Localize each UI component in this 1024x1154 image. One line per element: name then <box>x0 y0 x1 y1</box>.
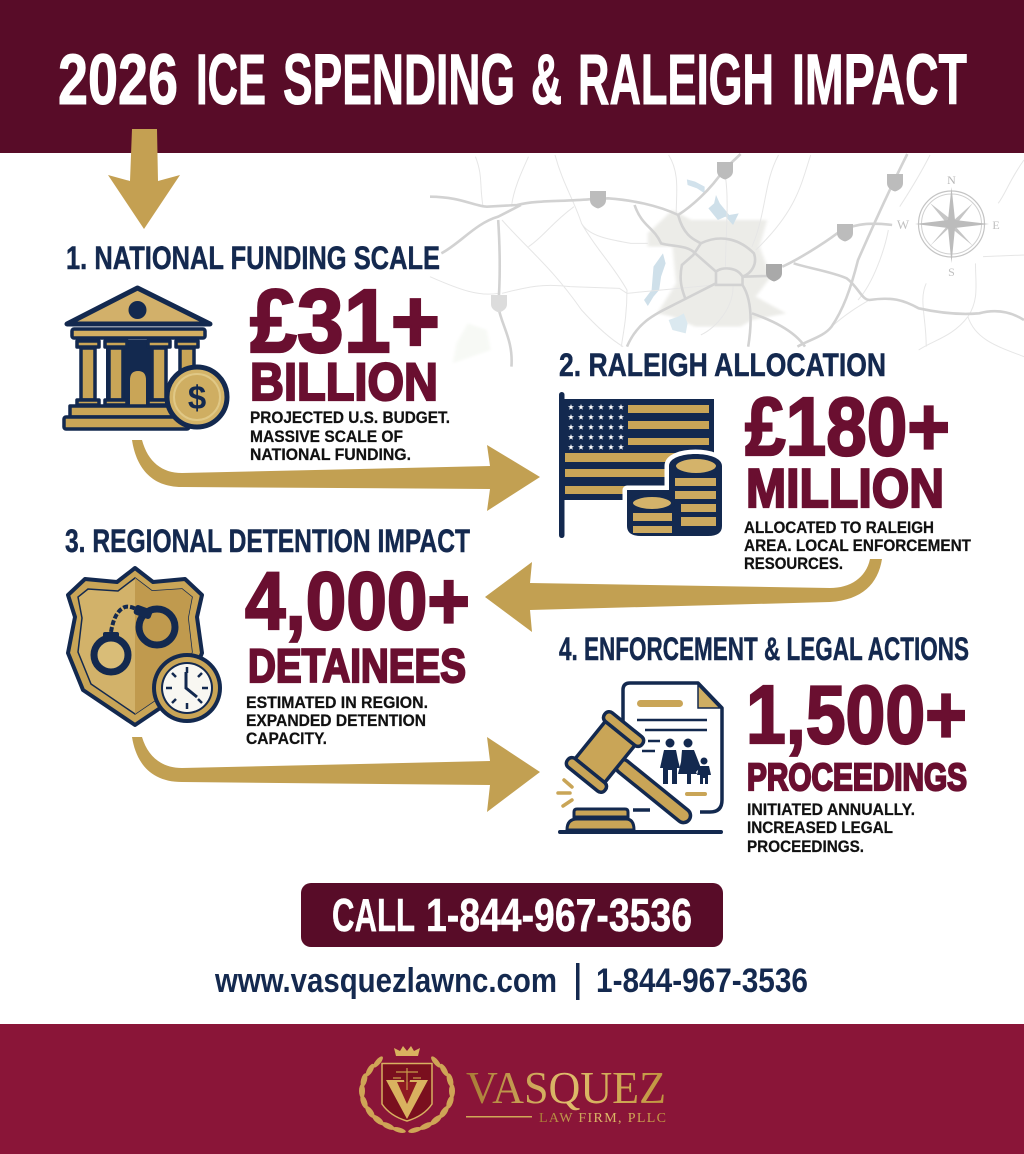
description: RESOURCES. <box>744 554 843 573</box>
title: 2026 <box>58 41 178 120</box>
unit: MILLION <box>746 457 944 519</box>
description: PROJECTED U.S. BUDGET. <box>250 408 450 427</box>
description: EXPANDED DETENTION <box>246 711 426 730</box>
heading 2: 2. RALEIGH ALLOCATION <box>559 347 886 383</box>
panel: national funding scale <box>64 240 450 464</box>
description: INITIATED ANNUALLY. <box>747 800 915 819</box>
big number: £31+ <box>250 272 440 372</box>
logo emblem <box>359 1046 455 1134</box>
background map of Raleigh <box>430 154 1024 367</box>
footer band <box>0 1024 1024 1154</box>
heading 1: 1. NATIONAL FUNDING SCALE <box>66 240 440 276</box>
title: & <box>531 41 562 120</box>
map: compass rose: E <box>992 218 1000 232</box>
map: compass rose: S <box>948 265 955 279</box>
description: CAPACITY. <box>246 729 327 748</box>
title: ICE <box>196 41 266 120</box>
call to action button <box>301 883 723 947</box>
logo: Vasquez Law Firm <box>359 1046 666 1134</box>
description <box>747 800 915 856</box>
big number: 4,000+ <box>245 556 470 647</box>
icon: dollar sign: $ <box>188 379 206 416</box>
map: compass rose: N <box>947 173 956 187</box>
call to action button: 1-844-967-3536 <box>426 889 692 941</box>
arrow: Raleigh allocation to detention <box>485 559 882 632</box>
logo wordmark: VASQUEZ <box>466 1062 666 1113</box>
big number: £180+ <box>745 380 950 473</box>
unit: DETAINEES <box>248 639 466 692</box>
unit: BILLION <box>250 353 438 412</box>
description: INCREASED LEGAL <box>747 818 893 837</box>
description: NATIONAL FUNDING. <box>250 445 411 464</box>
description: ESTIMATED IN REGION. <box>246 693 428 712</box>
contact line: 1-844-967-3536 <box>596 962 808 1000</box>
arrow: detention to enforcement <box>132 737 540 812</box>
contact line <box>214 962 808 1000</box>
title <box>58 41 967 120</box>
logo rule <box>466 1116 532 1118</box>
icon: flag and coins <box>559 392 722 538</box>
logo subtitle: LAW FIRM, PLLC <box>539 1111 666 1126</box>
description <box>744 518 972 573</box>
big number: 1,500+ <box>746 668 967 761</box>
heading 3: 3. REGIONAL DETENTION IMPACT <box>65 523 470 559</box>
description: AREA. LOCAL ENFORCEMENT <box>744 536 972 555</box>
panel: regional detention impact <box>65 523 470 748</box>
arrow: down from title <box>108 129 180 229</box>
unit: PROCEEDINGS <box>747 757 967 799</box>
map: compass rose: W <box>897 217 910 232</box>
icon: badge with handcuffs and clock <box>68 568 222 725</box>
arrow: funding to Raleigh allocation <box>132 440 540 511</box>
title: SPENDING <box>283 41 515 120</box>
title: RALEIGH <box>578 41 774 120</box>
icon: gavel and family document <box>558 683 723 847</box>
description: ALLOCATED TO RALEIGH <box>744 518 934 537</box>
description: PROCEEDINGS. <box>747 837 864 856</box>
description <box>246 693 428 748</box>
map: city area <box>430 154 1024 367</box>
icon: bank with dollar coin <box>64 288 227 429</box>
description <box>250 408 450 464</box>
call to action button: CALL <box>332 889 415 941</box>
panel: Raleigh allocation <box>559 347 972 573</box>
panel: enforcement and legal actions <box>558 631 969 856</box>
map: compass rose <box>897 173 1000 279</box>
map: highway shields <box>491 162 903 312</box>
contact line: www.vasquezlawnc.com <box>214 962 557 1000</box>
description: MASSIVE SCALE OF <box>250 427 403 446</box>
header band <box>0 0 1024 153</box>
